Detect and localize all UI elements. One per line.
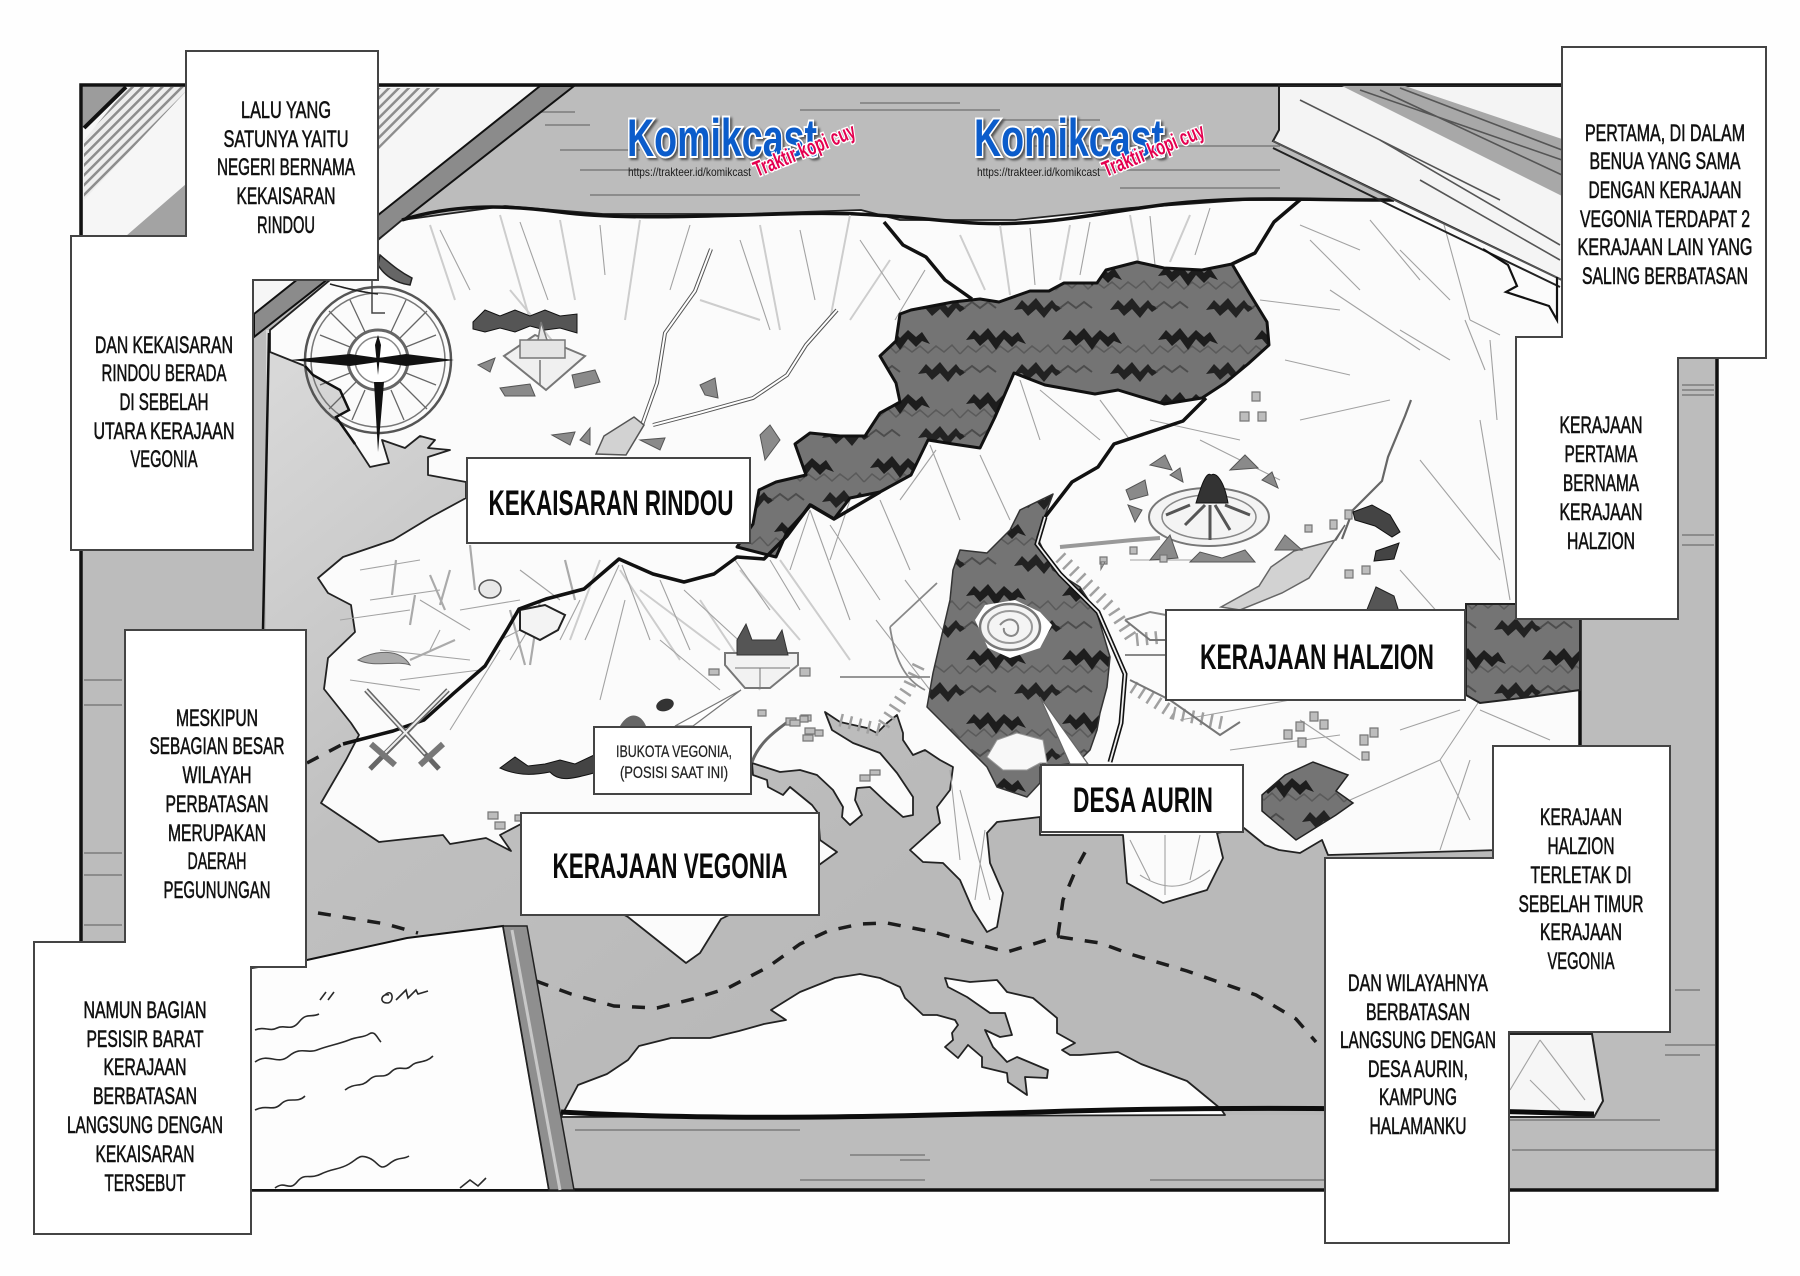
- lower forest around the hidden village: [927, 494, 1110, 797]
- crossed swords marking the battle border: [366, 690, 448, 769]
- southern landmass: [561, 974, 1225, 1117]
- caption: Kerajaan Halzion terletak: TERLETAK DI: [1530, 862, 1632, 889]
- watermark: Komikcast left: Komikcast: [627, 109, 817, 168]
- pointer: village callout tail: [1040, 697, 1088, 764]
- capital castle of Vegonia: [488, 624, 815, 829]
- caption: Dan Kekaisaran Rindou: DI SEBELAH: [120, 389, 208, 416]
- caption: Kerajaan Halzion terletak: KERAJAAN: [1540, 919, 1622, 946]
- caption: Dan Kekaisaran Rindou: DAN KEKAISARAN: [95, 332, 233, 359]
- dark hills: [500, 505, 1400, 779]
- label: Desa Aurin: [1041, 765, 1243, 832]
- north-west coastal reef: [330, 255, 412, 294]
- caption: Kerajaan Halzion terletak: VEGONIA: [1548, 948, 1614, 975]
- watermark: Komikcast right: Komikcast: [974, 109, 1164, 168]
- road to the east castle: [1060, 538, 1160, 547]
- sea on the map: [266, 330, 1580, 1115]
- volcano crater: [520, 605, 565, 640]
- caption: Dan wilayahnya: [1340, 970, 1496, 1140]
- village clearing: [975, 600, 1052, 658]
- compass rose: [290, 281, 454, 452]
- dashed sea route north-west: [318, 913, 418, 933]
- caption: Kerajaan pertama: HALZION: [1567, 528, 1635, 555]
- watermark: Komikcast left: Traktir kopi cuy: [750, 118, 859, 182]
- map lower edge: [561, 1108, 1594, 1117]
- caption: Kerajaan Halzion terletak: SEBELAH TIMUR: [1518, 891, 1644, 918]
- dashed border on the west coast: [307, 744, 343, 763]
- top-left wooden map corner: [83, 86, 574, 337]
- watermark: Komikcast right: https://trakteer.id/komikcast: [977, 165, 1101, 179]
- caption: Kerajaan Halzion terletak: HALZION: [1548, 833, 1614, 860]
- caption: Namun bagian: KERAJAAN: [104, 1054, 186, 1081]
- eastern forest patch behind the label: [1466, 604, 1580, 703]
- map right edge: [1578, 600, 1582, 746]
- caption: Lalu yang satunya: KEKAISARAN: [236, 183, 336, 210]
- caption: Dan Kekaisaran Rindou: [94, 332, 234, 473]
- eastern kingdom castle: [1100, 455, 1370, 578]
- caption: Lalu yang satunya: NEGERI BERNAMA: [217, 154, 355, 181]
- caption: Kerajaan Halzion terletak: [1518, 804, 1644, 975]
- white cliff inside the lower forest: [987, 733, 1047, 770]
- border line between the kingdoms: [343, 492, 880, 744]
- caption: Dan Kekaisaran Rindou: UTARA KERAJAAN: [94, 418, 234, 445]
- caption: Lalu yang satunya: SATUNYA YAITU: [224, 126, 348, 153]
- small southeast forest: [1262, 762, 1353, 840]
- caption: Namun bagian: LANGSUNG DENGAN: [67, 1112, 223, 1139]
- caption: Lalu yang satunya: LALU YANG: [241, 97, 331, 124]
- dead forest region in the west: [340, 520, 575, 690]
- panel: Halzion introduction narration: [1516, 47, 1766, 619]
- dashed route branch to the village: [1058, 843, 1090, 935]
- crenellated coast cliffs: [752, 612, 1240, 762]
- panel: western border narration: [34, 630, 306, 1234]
- caption: Dan wilayahnya: BERBATASAN: [1366, 999, 1470, 1026]
- map top edge: [402, 199, 1394, 224]
- label: Kerajaan Halzion: [1166, 610, 1465, 700]
- label: Desa Aurin: DESA AURIN: [1073, 781, 1213, 820]
- caption: Kerajaan pertama: KERAJAAN: [1560, 412, 1642, 439]
- caption: Namun bagian: NAMUN BAGIAN: [84, 997, 206, 1024]
- border river through the mountains: [884, 199, 1301, 762]
- river and lake in the east: [1221, 400, 1411, 610]
- top-right wooden map corner: [1273, 86, 1562, 287]
- cliffs ringing the lower forest: [840, 557, 1223, 745]
- caption: Lalu yang satunya: [217, 97, 355, 239]
- caption: Meskipun: SEBAGIAN BESAR: [150, 733, 284, 760]
- south-east map corner: [1500, 1034, 1603, 1117]
- caption: Meskipun: DAERAH: [188, 848, 246, 875]
- caption: Kerajaan pertama: [1560, 412, 1642, 555]
- label: Kerajaan Vegonia: KERAJAAN VEGONIA: [552, 847, 788, 886]
- caption: Dan wilayahnya: KAMPUNG: [1379, 1084, 1457, 1111]
- caption: Dan wilayahnya: DAN WILAYAHNYA: [1348, 970, 1488, 997]
- label: Kerajaan Halzion: KERAJAAN HALZION: [1200, 638, 1434, 677]
- caption: Dan wilayahnya: HALAMANKU: [1370, 1113, 1466, 1140]
- dashed route east: [1060, 937, 1316, 1042]
- label: Kekaisaran Rindou: [467, 458, 750, 543]
- label: Kekaisaran Rindou: KEKAISARAN RINDOU: [488, 484, 734, 523]
- map left edge: [263, 333, 269, 630]
- caption: Kerajaan pertama: BERNAMA: [1563, 470, 1639, 497]
- northern imperial castle: [473, 310, 780, 460]
- caption: Kerajaan pertama: PERTAMA: [1564, 441, 1638, 468]
- table speed lines: [84, 103, 1715, 1180]
- panel: Kekaisaran Rindou narration: [71, 51, 378, 550]
- watermark: Komikcast right: Traktir kopi cuy: [1099, 118, 1208, 182]
- caption: Namun bagian: TERSEBUT: [104, 1170, 186, 1197]
- label: Ibukota Vegonia: [594, 727, 751, 794]
- caption: Namun bagian: KEKAISARAN: [96, 1141, 194, 1168]
- pointer: capital callout tail: [675, 690, 741, 726]
- caption: Lalu yang satunya: RINDOU: [257, 212, 315, 239]
- caption: Dan Kekaisaran Rindou: RINDOU BERADA: [102, 360, 226, 387]
- coast line behind the top-right corner: [1483, 249, 1557, 320]
- caption: Dan wilayahnya: LANGSUNG DENGAN: [1340, 1027, 1496, 1054]
- main landmass: [270, 200, 1580, 963]
- coast line crossing the compass: [305, 366, 355, 444]
- large northern forest: [737, 262, 1269, 557]
- caption: Pertama: [1578, 120, 1752, 290]
- caption: Meskipun: WILAYAH: [182, 762, 252, 789]
- table frame: [81, 85, 1717, 1190]
- panel: Halzion location narration: [1325, 746, 1670, 1243]
- caption: Kerajaan pertama: KERAJAAN: [1560, 499, 1642, 526]
- caption: Dan Kekaisaran Rindou: VEGONIA: [130, 446, 198, 473]
- caption: Meskipun: PEGUNUNGAN: [164, 877, 270, 904]
- caption: Meskipun: [150, 705, 284, 904]
- caption: Namun bagian: PESISIR BARAT: [86, 1026, 204, 1053]
- open book with handwriting: [251, 926, 574, 1190]
- caption: Kerajaan Halzion terletak: KERAJAAN: [1540, 804, 1622, 831]
- caption: Meskipun: PERBATASAN: [166, 791, 268, 818]
- watermark: Komikcast left: https://trakteer.id/komikcast: [628, 165, 752, 179]
- caption: Meskipun: MERUPAKAN: [168, 820, 266, 847]
- label: Ibukota Vegonia: (POSISI SAAT INI): [620, 763, 728, 782]
- caption: Dan wilayahnya: DESA AURIN,: [1368, 1056, 1468, 1083]
- caption: Namun bagian: BERBATASAN: [93, 1083, 197, 1110]
- label: Ibukota Vegonia: IBUKOTA VEGONIA,: [616, 742, 732, 761]
- mountain shading and contour lines: [430, 208, 1585, 1110]
- dashed sea route south: [536, 923, 1060, 1008]
- caption: Meskipun: MESKIPUN: [176, 705, 258, 732]
- rivers in the north: [596, 249, 837, 455]
- label: Kerajaan Vegonia: [521, 813, 819, 915]
- caption: Namun bagian: [67, 997, 223, 1197]
- houses near the gulf: [790, 392, 1378, 781]
